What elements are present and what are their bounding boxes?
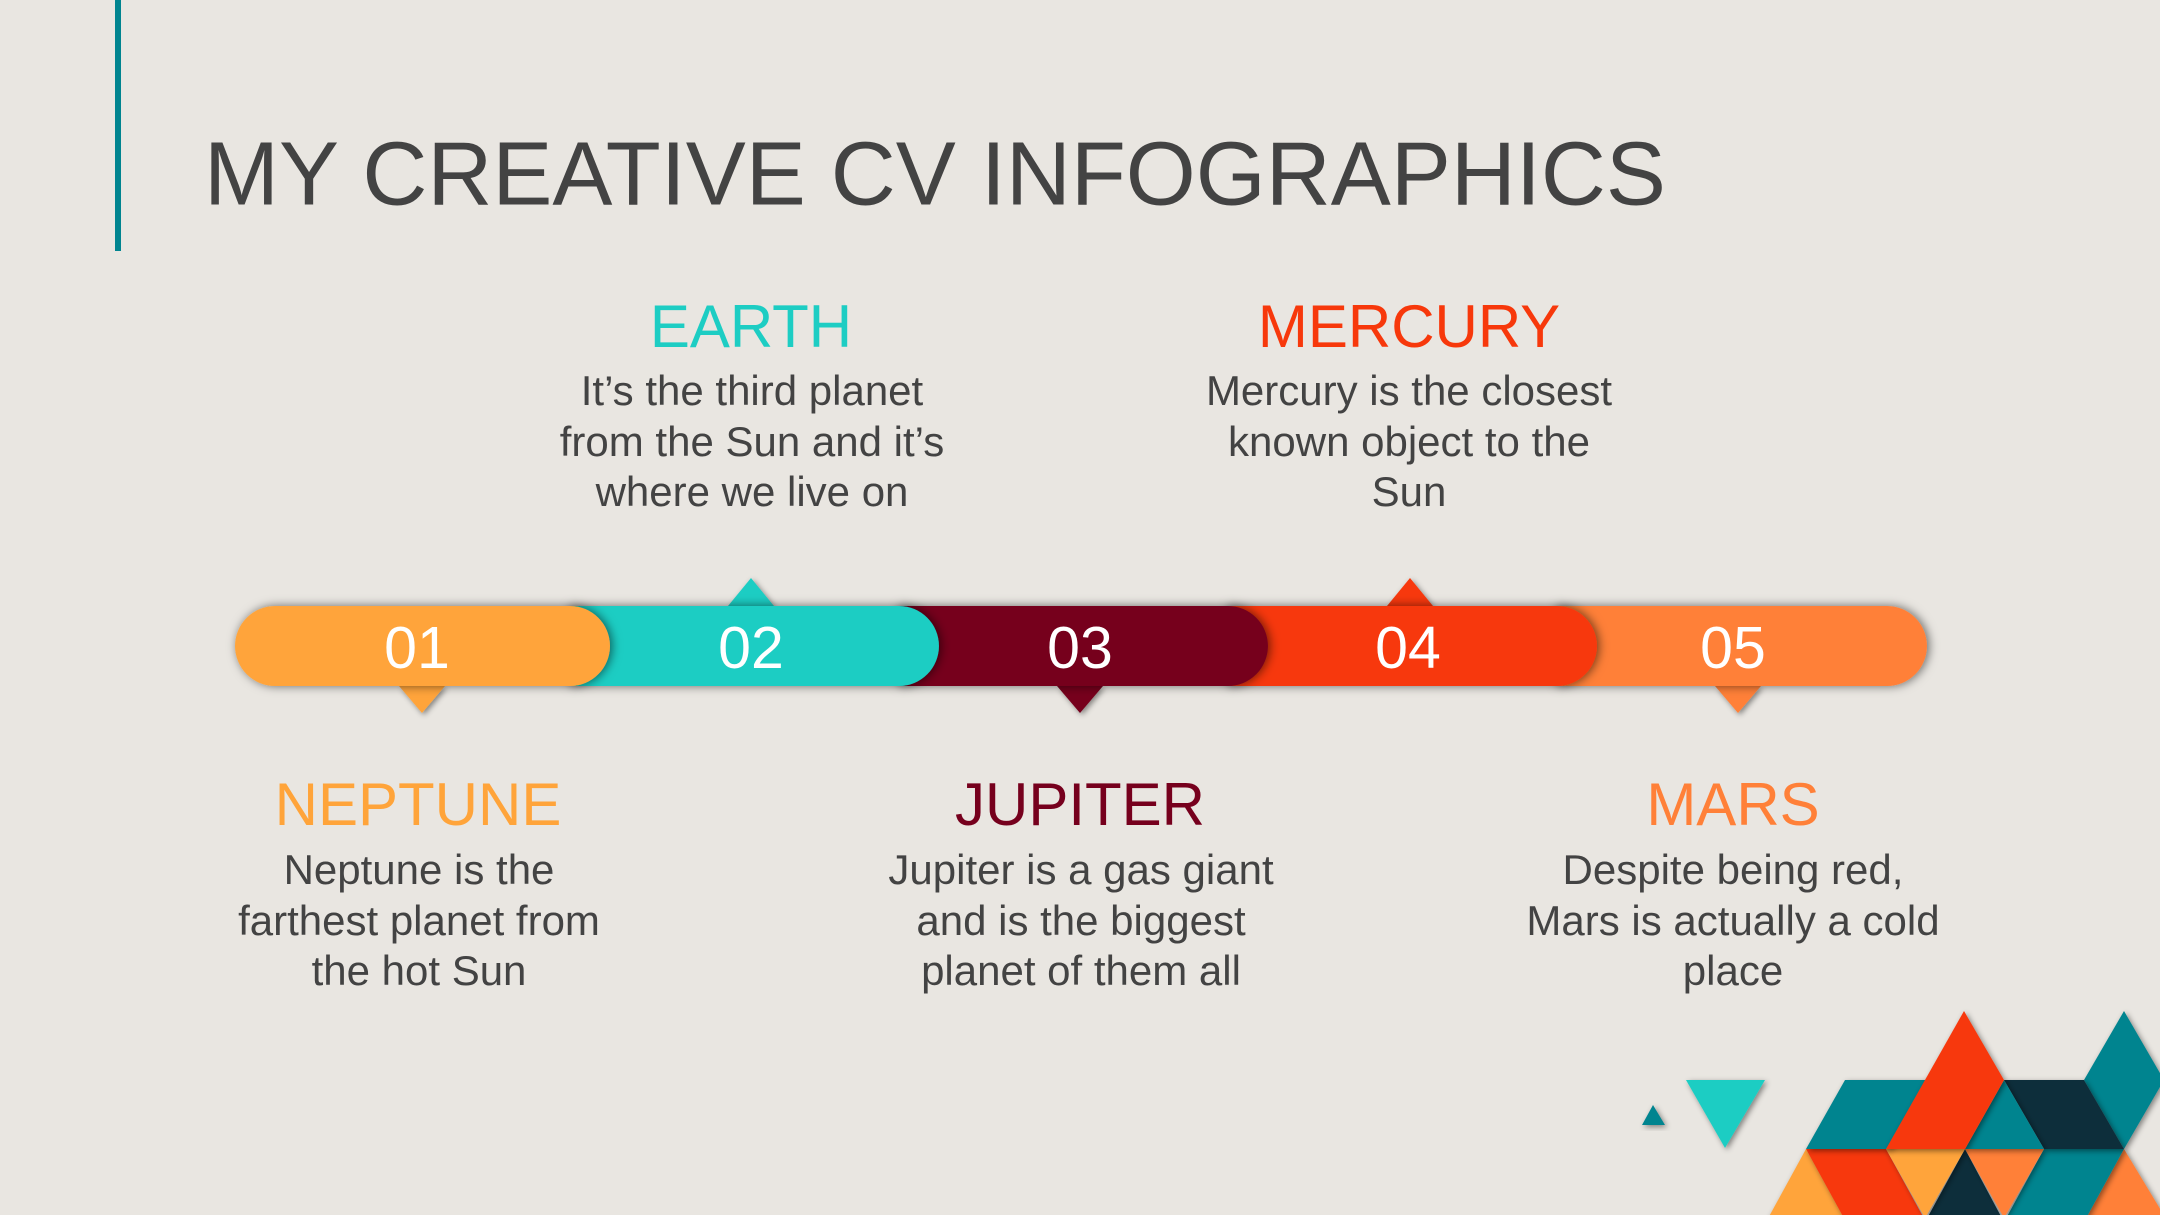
text: mars: place <box>1683 947 1783 994</box>
pointer: mercury <box>1387 578 1433 606</box>
text: neptune: farthest planet from <box>238 897 600 944</box>
timeline <box>235 578 1927 713</box>
block: jupiter <box>888 771 1274 994</box>
heading: jupiter: JUPITER <box>955 771 1205 838</box>
block: mars <box>1526 771 1940 994</box>
text: mercury: Mercury is the closest <box>1206 367 1612 414</box>
text: mars: Mars is actually a cold <box>1526 897 1940 944</box>
text: jupiter: Jupiter is a gas giant <box>888 846 1274 893</box>
block: neptune <box>238 771 600 994</box>
text: neptune: the hot Sun <box>312 947 526 994</box>
text: jupiter: and is the biggest <box>916 897 1246 944</box>
block: earth <box>560 293 944 515</box>
pointer: neptune <box>399 686 445 713</box>
pointer: mars <box>1715 686 1761 713</box>
heading: neptune: NEPTUNE <box>275 771 561 838</box>
text: jupiter <box>888 846 1274 994</box>
pointer: jupiter <box>1057 686 1103 713</box>
title: MY CREATIVE CV INFOGRAPHICS <box>204 124 1666 224</box>
text: earth: from the Sun and it’s <box>560 418 944 465</box>
text: mars: Despite being red, <box>1563 846 1903 893</box>
accent bar <box>115 0 121 251</box>
text: jupiter: planet of them all <box>921 947 1241 994</box>
text: earth: It’s the third planet <box>581 367 924 414</box>
text: mars <box>1526 846 1940 994</box>
text: mercury <box>1206 367 1612 515</box>
segment 04 <box>1226 606 1597 686</box>
text: neptune: Neptune is the <box>284 846 554 893</box>
number 05: 05 <box>1700 615 1766 681</box>
icon: small teal triangle <box>1642 1105 1665 1125</box>
segment 02 <box>568 606 939 686</box>
text: earth <box>560 367 944 515</box>
text: earth: where we live on <box>595 468 908 515</box>
number 03: 03 <box>1047 615 1113 681</box>
number 04: 04 <box>1375 615 1441 681</box>
heading: mercury: MERCURY <box>1258 293 1560 360</box>
icon: inverted turquoise triangle <box>1686 1080 1765 1148</box>
text: mercury: Sun <box>1372 468 1446 515</box>
text: mercury: known object to the <box>1228 418 1590 465</box>
decoration: triangle mosaic <box>1766 1011 2160 1215</box>
segment 01 <box>235 606 610 686</box>
block: mercury <box>1206 293 1612 515</box>
segment 03 <box>897 606 1268 686</box>
segment 05 <box>1555 606 1927 686</box>
text: neptune <box>238 846 600 994</box>
number 02: 02 <box>718 615 784 681</box>
pointer: earth <box>728 578 774 606</box>
heading: mars: MARS <box>1646 771 1820 838</box>
heading: earth: EARTH <box>650 293 852 360</box>
number 01: 01 <box>384 615 450 681</box>
